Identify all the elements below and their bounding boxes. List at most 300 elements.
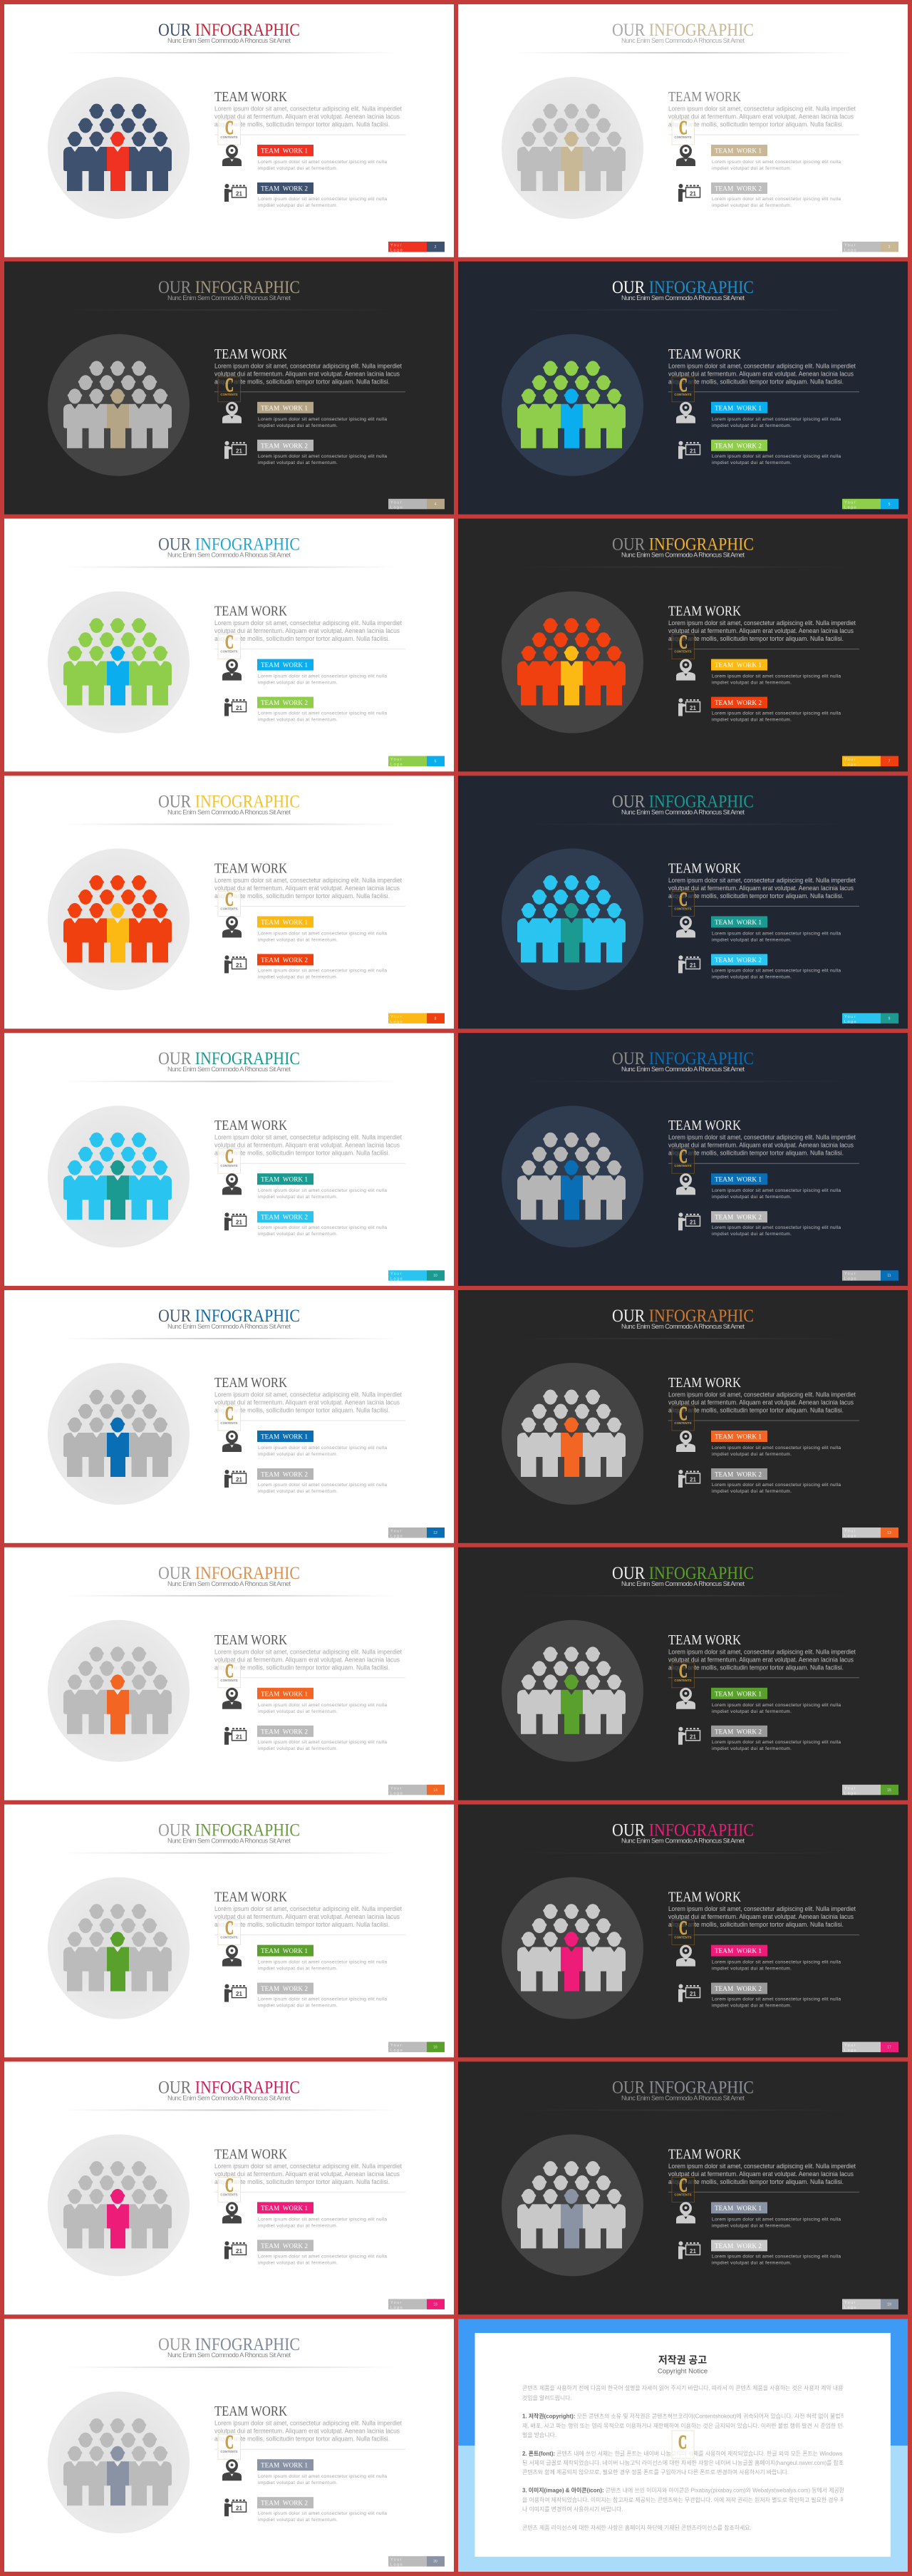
watermark logo: C [225,1145,234,1167]
badge: team work 2: TEAM WORK 2 [261,2243,308,2250]
badge: team work 2: TEAM WORK 2 [715,185,762,192]
footer: logo and page number: Your [844,1272,856,1277]
footer: logo and page number: 17 [887,2046,891,2050]
paragraph: aliquet ante mollis, sollicitudin tempor tortor aliquam. Nulla facilisi. [668,635,844,642]
footer: logo and page number: Logo [390,2563,403,2567]
paragraph [668,877,856,900]
paragraph: volutpat dui at fermentum. Aliquam erat volutpat. Aenean lacinia lacus [668,885,854,892]
text: team work 2: Lorem ipsum dolor sit amet consectetur ipiscing elit nulla [712,1740,841,1745]
paragraph: volutpat dui at fermentum. Aliquam erat volutpat. Aenean lacinia lacus [668,2170,854,2178]
text: team work 2: Lorem ipsum dolor sit amet consectetur ipiscing elit nulla [258,1997,387,2002]
text: team work 1 [258,2217,387,2228]
paragraph: volutpat dui at fermentum. Aliquam erat volutpat. Aenean lacinia lacus [214,1913,400,1920]
watermark logo: C [679,1403,688,1424]
slide 18: grey and slate on charcoal [458,2061,908,2314]
paragraph: volutpat dui at fermentum. Aliquam erat volutpat. Aenean lacinia lacus [668,1913,854,1920]
heading: TEAM WORK [214,1890,287,1905]
text: team work 1: Lorem ipsum dolor sit amet consectetur ipiscing elit nulla [712,2217,841,2222]
text: team work 1 [712,160,841,171]
team illustration [502,1106,643,1247]
footer: logo and page number [388,242,445,252]
badge: team work 2: TEAM WORK 2 [715,1215,762,1222]
badge: team work 2 [711,1983,767,1994]
heading: TEAM WORK [668,1375,741,1391]
subtitle: Nunc Enim Sem Commodo A Rhoncus Sit Amet [167,808,291,815]
text: team work 1: Lorem ipsum dolor sit amet consectetur ipiscing elit nulla [258,1703,387,1708]
subtitle: Nunc Enim Sem Commodo A Rhoncus Sit Amet [621,294,745,302]
text: team work 1: impdiet volutpat dui at fermentum. [258,1452,338,1457]
subtitle: Nunc Enim Sem Commodo A Rhoncus Sit Amet [167,1580,291,1587]
paragraph: aliquet ante mollis, sollicitudin tempor tortor aliquam. Nulla facilisi. [668,378,844,385]
badge: team work 2: TEAM WORK 2 [715,443,762,450]
badge: team work 1 [711,402,767,413]
footer: logo and page number: Logo [390,1791,403,1796]
text: team work 1: impdiet volutpat dui at fermentum. [712,937,792,942]
paragraph: volutpat dui at fermentum. Aliquam erat volutpat. Aenean lacinia lacus [668,1656,854,1663]
badge: team work 2 [711,440,767,451]
paragraph: Lorem ipsum dolor sit amet, consectetur adipiscing elit. Nulla imperdiet [214,1648,402,1655]
icon: presenter with calendar: 21 [690,962,696,969]
watermark logo: C [225,1917,234,1939]
text: team work 2: impdiet volutpat dui at fermentum. [258,2518,338,2523]
icon: presenter with calendar: 21 [236,2505,242,2512]
footer: logo and page number: 14 [433,1788,437,1793]
watermark logo: CONTENTS [674,650,692,654]
title: OUR INFOGRAPHIC [158,278,300,297]
badge: team work 1: TEAM WORK 1 [261,405,308,412]
watermark logo [218,117,241,145]
watermark logo: C [225,1660,234,1681]
badge: team work 1 [711,1688,767,1699]
footer: logo and page number: Your [390,1530,403,1534]
paragraph: aliquet ante mollis, sollicitudin tempor tortor aliquam. Nulla facilisi. [668,1664,844,1671]
badge: team work 1 [711,1945,767,1957]
watermark logo [218,374,241,402]
footer: logo and page number [388,1270,445,1282]
watermark logo: CONTENTS [220,1164,238,1168]
title: OUR INFOGRAPHIC [158,2078,300,2097]
text: team work 2: impdiet volutpat dui at fermentum. [712,203,792,208]
heading: TEAM WORK [668,604,741,619]
watermark logo: C [679,1660,688,1681]
text: team work 2: Lorem ipsum dolor sit amet consectetur ipiscing elit nulla [258,2511,387,2516]
footer: logo and page number: 9 [888,1016,891,1021]
footer: logo and page number: 15 [887,1788,891,1793]
paragraph: volutpat dui at fermentum. Aliquam erat volutpat. Aenean lacinia lacus [668,113,854,120]
footer: logo and page number: Your [390,2301,403,2305]
paragraph: aliquet ante mollis, sollicitudin tempor tortor aliquam. Nulla facilisi. [214,1921,390,1928]
icon: presenter with calendar: 21 [690,705,696,711]
text: team work 1 [258,160,387,171]
subtitle: Nunc Enim Sem Commodo A Rhoncus Sit Amet [621,808,745,815]
subtitle: Nunc Enim Sem Commodo A Rhoncus Sit Amet [167,37,291,44]
slide 17: grey and pink on white [4,2061,454,2314]
icon: presenter with calendar [224,699,247,716]
badge: team work 1: TEAM WORK 1 [261,662,308,669]
text: team work 2: impdiet volutpat dui at fermentum. [712,974,792,979]
title: OUR INFOGRAPHIC [158,792,300,811]
watermark logo [672,374,694,402]
text: team work 1: Lorem ipsum dolor sit amet consectetur ipiscing elit nulla [258,1446,387,1451]
text: team work 2: impdiet volutpat dui at fermentum. [712,460,792,465]
text: team work 1: impdiet volutpat dui at fermentum. [712,2223,792,2228]
paragraph: volutpat dui at fermentum. Aliquam erat volutpat. Aenean lacinia lacus [214,627,400,634]
watermark logo [672,2174,694,2202]
title: OUR INFOGRAPHIC [612,1049,754,1068]
footer: logo and page number: Logo [844,248,857,252]
slide 20: copyright notice [458,2319,908,2572]
paragraph [214,2420,402,2443]
icon: presenter with calendar [224,1470,247,1488]
badge: team work 2 [257,1983,314,1994]
watermark logo: C [225,888,234,910]
text: team work 2: Lorem ipsum dolor sit amet consectetur ipiscing elit nulla [712,2254,841,2259]
text: team work 1: Lorem ipsum dolor sit amet consectetur ipiscing elit nulla [712,417,841,422]
text: team work 2: Lorem ipsum dolor sit amet consectetur ipiscing elit nulla [712,968,841,973]
icon: person with gear [676,2202,695,2223]
text: team work 2: Lorem ipsum dolor sit amet consectetur ipiscing elit nulla [258,711,387,716]
notice body text: 콘텐츠 제품 라이선스에 대한 자세한 사항은 홈페이지 하단에 기재된 콘텐츠라이선스를 참조하세요. [522,2524,752,2531]
icon: person with gear [676,402,695,423]
icon: person with gear [222,916,242,937]
watermark logo [218,1660,241,1688]
notice body text: 콘텐츠와 함께 제공되지 않으므로, 필요한 경우 정품 폰트를 구입하거나 다른 폰트로 변경하여 사용하시기 바랍니다. [522,2468,789,2475]
text: team work 1: Lorem ipsum dolor sit amet consectetur ipiscing elit nulla [258,1960,387,1965]
paragraph: Lorem ipsum dolor sit amet, consectetur adipiscing elit. Nulla imperdiet [214,105,402,113]
footer: logo and page number: 13 [887,1531,891,1535]
text: team work 1 [258,1188,387,1200]
footer: logo and page number: Logo [390,1277,403,1282]
badge: team work 2: TEAM WORK 2 [715,957,762,964]
badge: team work 2: TEAM WORK 2 [261,2500,308,2508]
icon: person with gear [676,145,695,166]
watermark logo: CONTENTS [220,135,238,139]
footer: logo and page number: Logo [390,763,403,767]
icon: presenter with calendar: 21 [690,1220,696,1226]
text: team work 1: impdiet volutpat dui at fermentum. [258,2480,338,2485]
footer: logo and page number: Your [390,2044,403,2048]
notice title: 저작권 공고 [658,2354,707,2366]
text: team work 2 [712,1483,841,1494]
icon: presenter with calendar [678,184,700,202]
paragraph: Lorem ipsum dolor sit amet, consectetur adipiscing elit. Nulla imperdiet [668,1648,856,1655]
watermark logo: CONTENTS [674,1936,692,1939]
watermark logo [672,2431,694,2458]
watermark logo: C [679,1917,688,1939]
footer: logo and page number [388,2042,445,2053]
text: team work 1 [712,2217,841,2228]
watermark logo: CONTENTS [674,1421,692,1425]
icon: presenter with calendar [678,1470,700,1488]
watermark logo: C [679,117,688,138]
footer: logo and page number: Your [390,1786,403,1791]
heading: TEAM WORK [214,346,287,362]
paragraph [668,619,856,642]
paragraph: volutpat dui at fermentum. Aliquam erat volutpat. Aenean lacinia lacus [668,627,854,634]
text: team work 2: Lorem ipsum dolor sit amet consectetur ipiscing elit nulla [258,968,387,973]
team illustration [48,1877,190,2019]
badge: team work 2 [257,2240,314,2251]
paragraph: Lorem ipsum dolor sit amet, consectetur adipiscing elit. Nulla imperdiet [668,1905,856,1912]
text: team work 1 [712,1446,841,1457]
icon: person with gear [676,1945,695,1967]
badge: team work 1 [257,2202,314,2213]
subtitle: Nunc Enim Sem Commodo A Rhoncus Sit Amet [167,2094,291,2101]
paragraph: Lorem ipsum dolor sit amet, consectetur adipiscing elit. Nulla imperdiet [214,1134,402,1141]
title: OUR INFOGRAPHIC [158,535,300,555]
title: OUR INFOGRAPHIC [612,792,754,811]
footer: logo and page number [842,1270,898,1282]
watermark logo: CONTENTS [674,1164,692,1168]
badge: team work 1 [257,2459,314,2471]
footer: logo and page number: Logo [390,505,403,510]
team illustration [48,1106,190,1247]
slide 9: cyan and teal on white [4,1033,454,1286]
panel: notice [475,2333,891,2557]
watermark logo: CONTENTS [220,393,238,396]
footer: logo and page number: Your [844,2044,856,2048]
icon: presenter with calendar [224,2498,247,2516]
title: OUR INFOGRAPHIC [158,21,300,40]
text: team work 2: Lorem ipsum dolor sit amet consectetur ipiscing elit nulla [258,1483,387,1488]
text: team work 1: impdiet volutpat dui at fermentum. [258,937,338,942]
paragraph: Lorem ipsum dolor sit amet, consectetur adipiscing elit. Nulla imperdiet [668,619,856,627]
notice body text: 것임을 알려드립니다. [522,2394,572,2401]
text: team work 2: impdiet volutpat dui at fermentum. [258,1232,338,1237]
text: team work 1: Lorem ipsum dolor sit amet consectetur ipiscing elit nulla [712,1960,841,1965]
paragraph: Lorem ipsum dolor sit amet, consectetur adipiscing elit. Nulla imperdiet [668,1391,856,1398]
text: team work 1: impdiet volutpat dui at fermentum. [258,166,338,171]
badge: team work 2 [257,1211,314,1222]
footer: logo and page number [388,2556,445,2567]
footer: logo and page number [388,499,445,510]
icon: person with gear [222,1173,242,1195]
icon: person with gear [676,1431,695,1452]
badge: team work 1: TEAM WORK 1 [715,148,762,155]
watermark logo [218,1917,241,1945]
title: OUR INFOGRAPHIC [612,278,754,297]
badge: team work 1 [257,916,314,927]
text: team work 2: Lorem ipsum dolor sit amet consectetur ipiscing elit nulla [712,197,841,202]
badge: team work 2 [257,1726,314,1737]
footer: logo and page number: Logo [390,1020,403,1024]
paragraph: volutpat dui at fermentum. Aliquam erat volutpat. Aenean lacinia lacus [668,1142,854,1149]
text: team work 1 [258,2474,387,2485]
footer: logo and page number: Logo [844,2049,857,2053]
heading: TEAM WORK [214,860,287,876]
watermark logo: CONTENTS [220,2193,238,2196]
slide 2: grey and tan on white [458,4,908,257]
notice body text: 3. 이미지(image) & 아이콘(icon): 콘텐츠 내에 쓰인 이미지와 아이콘은 Pixabay(pixabay.com)와 Webalys(webalys.com) 등에서 제공한 무료 저작물 [522,2486,874,2493]
heading: TEAM WORK [668,1890,741,1905]
text: team work 2: impdiet volutpat dui at fermentum. [712,1489,792,1494]
team illustration [48,77,190,219]
text: team work 1: Lorem ipsum dolor sit amet consectetur ipiscing elit nulla [712,1188,841,1193]
text: team work 2: impdiet volutpat dui at fermentum. [258,2004,338,2009]
text: team work 1: impdiet volutpat dui at fermentum. [712,1452,792,1457]
paragraph: aliquet ante mollis, sollicitudin tempor tortor aliquam. Nulla facilisi. [668,1150,844,1157]
title: OUR INFOGRAPHIC [158,1821,300,1840]
watermark logo [218,1145,241,1173]
icon: person with gear [222,145,242,166]
icon: presenter with calendar: 21 [690,448,696,454]
icon: person with gear [222,1688,242,1709]
text: team work 1: impdiet volutpat dui at fermentum. [712,1967,792,1972]
title: OUR INFOGRAPHIC [158,2335,300,2354]
text: team work 2: impdiet volutpat dui at fermentum. [258,203,338,208]
badge: team work 2 [257,1468,314,1480]
text: team work 1: Lorem ipsum dolor sit amet consectetur ipiscing elit nulla [712,674,841,679]
badge: team work 2 [257,2497,314,2508]
notice body text: 나 이미지를 변경하여 사용하시기 바랍니다. [522,2505,623,2513]
badge: team work 2: TEAM WORK 2 [715,700,762,707]
footer: logo and page number: Logo [390,1534,403,1538]
text: team work 2: impdiet volutpat dui at fermentum. [258,974,338,979]
paragraph [214,362,402,385]
paragraph: volutpat dui at fermentum. Aliquam erat volutpat. Aenean lacinia lacus [214,1142,400,1149]
watermark logo: CONTENTS [674,2193,692,2196]
badge: team work 1: TEAM WORK 1 [715,662,762,669]
text: team work 1: impdiet volutpat dui at fermentum. [258,423,338,428]
paragraph [668,1648,856,1671]
watermark logo [672,1917,694,1945]
slide 16: grey and pink on charcoal [458,1805,908,2057]
text: team work 2: Lorem ipsum dolor sit amet consectetur ipiscing elit nulla [712,454,841,459]
team illustration [502,1877,643,2019]
heading: TEAM WORK [668,860,741,876]
paragraph: volutpat dui at fermentum. Aliquam erat volutpat. Aenean lacinia lacus [214,1656,400,1663]
notice body text: 재, 배포, 사고 파는 행위 또는 영리 목적으로 이용하거나 재판매하여 이용하는 것은 금지되어 있습니다. 이러한 불법 행위 발견 시 준엄한 민사 및 형사상의 처벌을 [522,2422,894,2429]
footer: logo and page number: Your [844,244,856,248]
paragraph: aliquet ante mollis, sollicitudin tempor tortor aliquam. Nulla facilisi. [214,1150,390,1157]
paragraph: aliquet ante mollis, sollicitudin tempor tortor aliquam. Nulla facilisi. [214,1664,390,1671]
paragraph: aliquet ante mollis, sollicitudin tempor tortor aliquam. Nulla facilisi. [668,1921,844,1928]
slide 8: cyan and teal on navy [458,776,908,1029]
text: team work 2: impdiet volutpat dui at fermentum. [258,1746,338,1751]
badge: team work 2: TEAM WORK 2 [261,185,308,192]
text: team work 1: Lorem ipsum dolor sit amet consectetur ipiscing elit nulla [258,417,387,422]
paragraph: Lorem ipsum dolor sit amet, consectetur adipiscing elit. Nulla imperdiet [668,877,856,884]
icon: presenter with calendar: 21 [236,2248,242,2255]
footer: logo and page number [842,242,898,252]
watermark logo: CONTENTS [674,907,692,910]
subtitle: Nunc Enim Sem Commodo A Rhoncus Sit Amet [621,552,745,559]
text: team work 2 [712,1225,841,1237]
paragraph [214,2163,402,2185]
footer: logo and page number: Logo [844,1277,857,1282]
badge: team work 1: TEAM WORK 1 [715,1177,762,1184]
text: team work 2 [258,711,387,723]
slide 10: grey and blue on navy [458,1033,908,1286]
paragraph: aliquet ante mollis, sollicitudin tempor tortor aliquam. Nulla facilisi. [668,2178,844,2185]
slide 14: grey and green on charcoal [458,1547,908,1800]
badge: team work 1: TEAM WORK 1 [261,919,308,927]
footer: logo and page number: 16 [433,2046,437,2050]
text: team work 1: Lorem ipsum dolor sit amet consectetur ipiscing elit nulla [712,931,841,936]
slide 3: grey and tan on charcoal [4,262,454,515]
footer: logo and page number: 11 [887,1274,891,1278]
team illustration [48,334,190,476]
watermark logo: C [225,1403,234,1424]
subtitle: Nunc Enim Sem Commodo A Rhoncus Sit Amet [167,1838,291,1845]
text: team work 2 [258,2254,387,2265]
badge: team work 2: TEAM WORK 2 [261,957,308,964]
icon: presenter with calendar [678,1984,700,2002]
watermark logo: C [679,1145,688,1167]
paragraph: Lorem ipsum dolor sit amet, consectetur adipiscing elit. Nulla imperdiet [214,877,402,884]
footer: logo and page number: 8 [435,1016,437,1021]
title: OUR INFOGRAPHIC [612,1564,754,1583]
watermark logo: CONTENTS [674,1679,692,1682]
icon: presenter with calendar [678,955,700,973]
notice body text: 된 서체의 글꼴로 제작되었습니다. 네이버 나눔고딕 라이선스에 대한 자세한 사항은 네이버 나눔글꼴 홈페이지(hangeul.naver.com)를 참조하세요. 폰트는 [522,2459,878,2466]
paragraph: aliquet ante mollis, sollicitudin tempor tortor aliquam. Nulla facilisi. [668,1407,844,1414]
icon: presenter with calendar: 21 [236,962,242,969]
subtitle: Nunc Enim Sem Commodo A Rhoncus Sit Amet [167,294,291,302]
slide 4: green and blue on navy [458,262,908,515]
footer: logo and page number: Your [390,1015,403,1019]
text: team work 1: impdiet volutpat dui at fermentum. [258,1709,338,1714]
badge: team work 2 [257,440,314,451]
text: team work 1: impdiet volutpat dui at fermentum. [258,1195,338,1200]
footer: logo and page number [842,1785,898,1796]
text: team work 2: impdiet volutpat dui at fermentum. [712,1746,792,1751]
title: OUR INFOGRAPHIC [612,535,754,555]
badge: team work 1: TEAM WORK 1 [261,1434,308,1441]
badge: team work 1: TEAM WORK 1 [715,1434,762,1441]
title: OUR INFOGRAPHIC [612,2078,754,2097]
text: team work 2 [712,197,841,208]
watermark logo [218,888,241,916]
notice body text: 콘텐츠 제품을 사용하기 전에 다음의 한국어 설명을 자세히 읽어 주시기 바랍니다. 따라서 이 콘텐츠 제품을 사용하는 것은 사용자 계약 내용에 동의한다는 것임 [522,2384,888,2391]
subtitle: Nunc Enim Sem Commodo A Rhoncus Sit Amet [621,1066,745,1073]
text: team work 1: Lorem ipsum dolor sit amet consectetur ipiscing elit nulla [258,931,387,936]
icon: presenter with calendar [678,441,700,459]
text: team work 2 [258,1225,387,1237]
footer: logo and page number: Logo [844,505,857,510]
text: team work 1: Lorem ipsum dolor sit amet consectetur ipiscing elit nulla [258,1188,387,1193]
icon: person with gear [222,2202,242,2223]
team illustration [48,592,190,733]
badge: team work 2: TEAM WORK 2 [261,1986,308,1993]
badge: team work 1 [257,1688,314,1699]
watermark logo: C [225,2431,234,2453]
slide 6: orange and yellow on charcoal [458,519,908,771]
footer: logo and page number [388,1013,445,1024]
watermark logo [218,2431,241,2459]
text: team work 1 [258,1446,387,1457]
watermark logo: C [679,374,688,396]
footer: logo and page number: Logo [844,1020,857,1024]
text: team work 2: Lorem ipsum dolor sit amet consectetur ipiscing elit nulla [258,2254,387,2259]
subtitle: Nunc Enim Sem Commodo A Rhoncus Sit Amet [167,2351,291,2359]
icon: presenter with calendar [224,184,247,202]
text: team work 1 [258,1703,387,1714]
icon: presenter with calendar [678,1727,700,1745]
notice body text: 벌을 받습니다. [522,2431,556,2438]
paragraph: Lorem ipsum dolor sit amet, consectetur adipiscing elit. Nulla imperdiet [214,619,402,627]
icon: person with gear [676,659,695,681]
footer: logo and page number [842,1527,898,1538]
footer: logo and page number: 7 [888,760,891,764]
text: team work 1: impdiet volutpat dui at fermentum. [258,2223,338,2228]
title: OUR INFOGRAPHIC [612,21,754,40]
badge: team work 1 [257,402,314,413]
watermark logo: CONTENTS [674,135,692,139]
icon: person with gear [676,1688,695,1709]
badge: team work 1: TEAM WORK 1 [715,1948,762,1955]
paragraph: aliquet ante mollis, sollicitudin tempor tortor aliquam. Nulla facilisi. [214,2436,390,2443]
